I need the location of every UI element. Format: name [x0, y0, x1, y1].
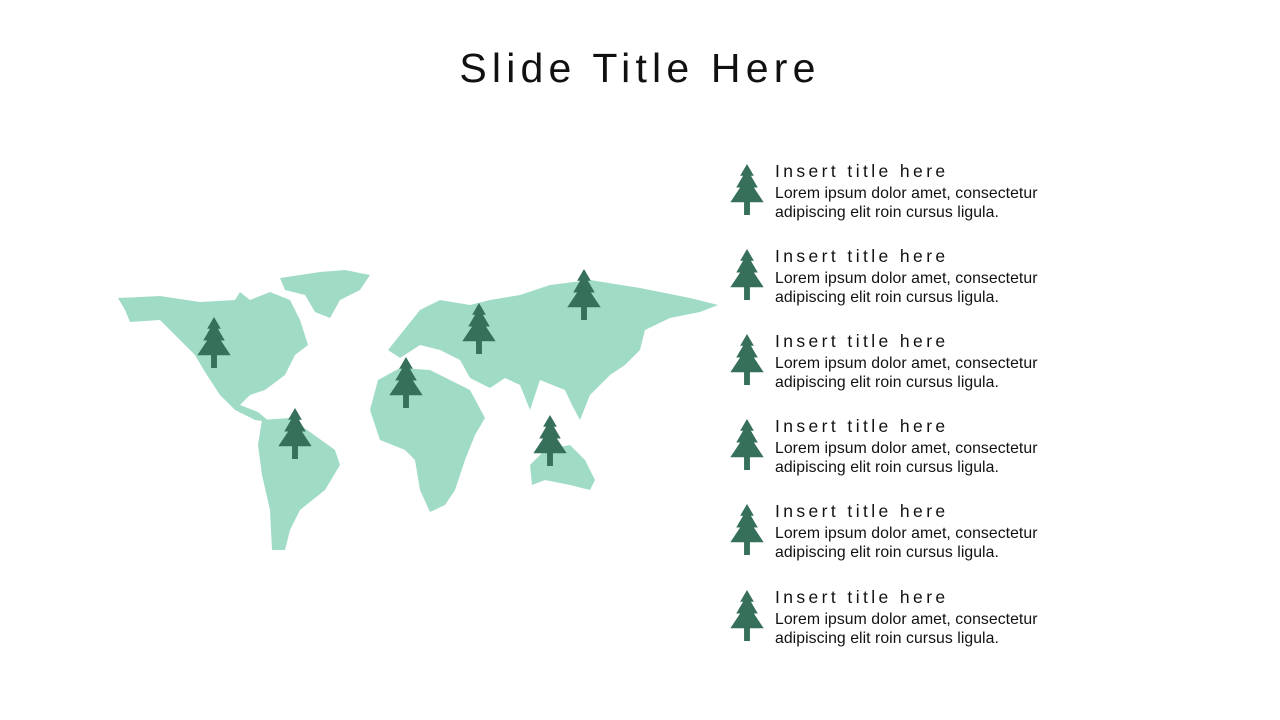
list item 2	[730, 246, 1038, 306]
list item 4	[730, 416, 1038, 476]
list item 2: adipiscing elit roin cursus ligula.	[775, 289, 999, 306]
icon: tree Russia	[567, 269, 601, 320]
list item 6: Insert title here	[775, 587, 949, 607]
map continents	[118, 270, 718, 550]
list item 3: adipiscing elit roin cursus ligula.	[775, 374, 999, 391]
list item 1	[730, 161, 1038, 221]
list item 1: adipiscing elit roin cursus ligula.	[775, 204, 999, 221]
icon: tree Europe	[462, 303, 496, 354]
list item 5: adipiscing elit roin cursus ligula.	[775, 544, 999, 561]
icon: tree Australia	[533, 415, 567, 466]
title: Slide Title Here	[459, 45, 821, 91]
list item 1: Insert title here	[775, 161, 949, 181]
list item 2: Lorem ipsum dolor amet, consectetur	[775, 270, 1038, 287]
list item 5: Lorem ipsum dolor amet, consectetur	[775, 525, 1038, 542]
list item 4: Insert title here	[775, 416, 949, 436]
list item 3: Insert title here	[775, 331, 949, 351]
list item 4: adipiscing elit roin cursus ligula.	[775, 459, 999, 476]
list item 5	[730, 501, 1038, 561]
list item 6: adipiscing elit roin cursus ligula.	[775, 630, 999, 647]
list item 5: Insert title here	[775, 501, 949, 521]
icon: tree South America	[278, 408, 312, 459]
list item 1: Lorem ipsum dolor amet, consectetur	[775, 185, 1038, 202]
icon: tree North America	[197, 317, 231, 368]
list item 6: Lorem ipsum dolor amet, consectetur	[775, 611, 1038, 628]
list item 3	[730, 331, 1038, 391]
list item 3: Lorem ipsum dolor amet, consectetur	[775, 355, 1038, 372]
list item 2: Insert title here	[775, 246, 949, 266]
list item 4: Lorem ipsum dolor amet, consectetur	[775, 440, 1038, 457]
list item 6	[730, 587, 1038, 647]
icon: tree Africa	[389, 357, 423, 408]
